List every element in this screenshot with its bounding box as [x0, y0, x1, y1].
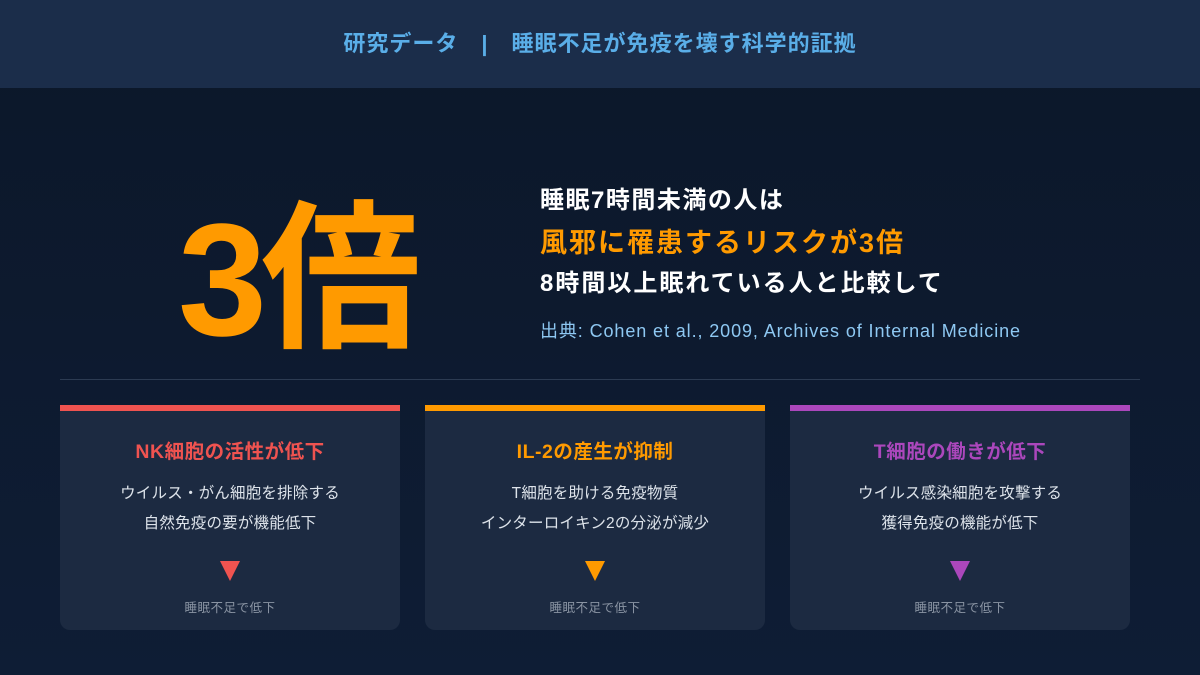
stat description [540, 187, 1021, 341]
card: NK cells [60, 405, 400, 630]
card: NK cells: ウイルス・がん細胞を排除する [120, 485, 340, 502]
stat description: 8時間以上眠れている人と比較して [540, 270, 944, 297]
card: NK cells: 自然免疫の要が機能低下 [144, 515, 316, 532]
card: T cells: 獲得免疫の機能が低下 [881, 515, 1038, 532]
card: IL-2: IL-2の産生が抑制 [517, 441, 673, 463]
header bar [0, 0, 1200, 88]
card: IL-2: T細胞を助ける免疫物質 [512, 485, 678, 502]
stat description: 風邪に罹患するリスクが3倍 [540, 228, 905, 258]
card: T cells: ウイルス感染細胞を攻撃する [858, 485, 1062, 502]
card: IL-2: インターロイキン2の分泌が減少 [481, 515, 709, 532]
stat description: 睡眠7時間未満の人は [540, 187, 784, 214]
card: T cells [790, 405, 1130, 630]
card: NK cells: NK細胞の活性が低下 [135, 441, 325, 463]
big stat: 3倍: 3倍 [178, 190, 415, 369]
card: NK cells: 睡眠不足で低下 [184, 601, 276, 615]
header bar: 研究データ | 睡眠不足が免疫を壊す科学的証拠 [343, 31, 857, 56]
stat description: 出典: Cohen et al., 2009, Archives of Internal Medicine [540, 321, 1021, 341]
card: T cells: 睡眠不足で低下 [914, 601, 1006, 615]
card: T cells: T細胞の働きが低下 [874, 441, 1046, 463]
card: IL-2: 睡眠不足で低下 [549, 601, 640, 615]
card: IL-2 [425, 405, 765, 630]
